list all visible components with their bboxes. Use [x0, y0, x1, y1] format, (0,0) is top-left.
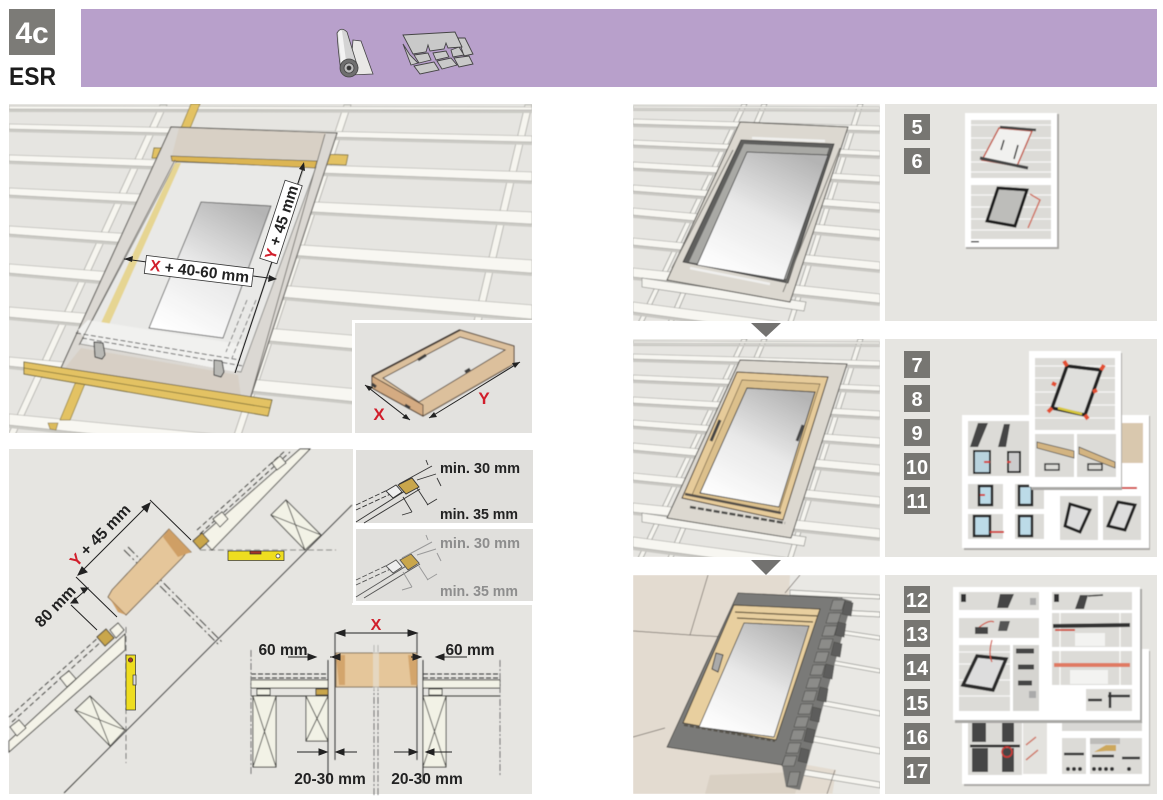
text grey min 30: min. 30 mm — [440, 535, 520, 552]
dimension arrows — [288, 630, 467, 755]
step numbers — [904, 351, 930, 514]
number 17: 17 — [906, 761, 928, 783]
inset: minimum batten dimensions — [353, 447, 533, 526]
thumbnail pages 5-6 — [965, 113, 1059, 249]
panel: image flashing frame — [633, 104, 880, 321]
text grey min 35: min. 35 mm — [440, 583, 518, 600]
number 16: 16 — [906, 727, 928, 749]
step numbers — [904, 114, 930, 174]
label X: X — [371, 617, 382, 634]
panel: steps 7-11 — [885, 339, 1157, 557]
inset: minimum batten dimensions grey — [353, 526, 533, 604]
header bar — [81, 9, 1157, 87]
felt frame around opening — [24, 127, 337, 416]
white gap around insets — [352, 603, 533, 605]
panel: image tiled roof — [633, 575, 880, 800]
icon: shingles — [403, 32, 473, 74]
number 10: 10 — [906, 457, 928, 479]
number 6: 6 — [911, 151, 923, 173]
arrow down — [751, 323, 781, 337]
step badge 4c — [9, 9, 55, 55]
number 9: 9 — [911, 423, 923, 445]
horizontal section drawing — [251, 633, 500, 795]
thumbnail back page — [962, 415, 1150, 550]
thumbnail front page — [953, 587, 1142, 723]
label Y + 45 mm: Y + 45 mm — [67, 501, 134, 570]
panel: steps 5-6 — [885, 104, 1157, 321]
label ESR: ESR — [9, 63, 56, 91]
dimension lines — [71, 500, 191, 630]
label 60 mm left: 60 mm — [258, 642, 308, 659]
text min 35: min. 35 mm — [440, 506, 518, 523]
tile stack — [782, 597, 853, 790]
panel: section dimensions — [9, 447, 533, 795]
number 5: 5 — [911, 117, 923, 139]
label 60 mm right: 60 mm — [445, 642, 495, 659]
dimension: Y + 45 mm: Y + 45 mm — [262, 183, 302, 262]
step badge 4c: 4c — [15, 17, 49, 50]
roof battens and rafters — [9, 104, 532, 433]
window cross section — [108, 529, 191, 615]
thumbnail back page — [962, 649, 1150, 786]
inset: frame X Y: X — [373, 405, 385, 424]
dimension: X + 40-60 mm — [124, 255, 277, 287]
roof section drawing — [9, 449, 352, 793]
dimension: X + 40-60 mm: X + 40-60 mm — [149, 258, 250, 287]
number 15: 15 — [906, 693, 928, 715]
number 7: 7 — [911, 355, 923, 377]
label 20-30 mm right: 20-30 mm — [391, 771, 463, 788]
number 11: 11 — [906, 491, 928, 513]
text min 30: min. 30 mm — [440, 460, 520, 477]
number 14: 14 — [906, 658, 929, 680]
number 12: 12 — [906, 590, 928, 612]
step numbers — [904, 586, 930, 784]
label 20-30 mm left: 20-30 mm — [294, 771, 366, 788]
panel: steps 12-17 — [885, 575, 1157, 794]
inset: frame X Y — [352, 320, 532, 433]
dimension: Y + 45 mm — [235, 162, 305, 373]
inset: frame X Y: Y — [478, 389, 490, 408]
thumbnail front page — [1029, 351, 1122, 490]
label 80 mm: 80 mm — [32, 583, 79, 631]
panel: roof opening measurement — [9, 104, 532, 433]
arrow down — [751, 560, 781, 575]
spirit levels — [126, 551, 284, 710]
panel: image window frame — [633, 339, 880, 557]
icon: underlay roll — [337, 29, 373, 77]
number 8: 8 — [911, 389, 923, 411]
number 13: 13 — [906, 624, 928, 646]
